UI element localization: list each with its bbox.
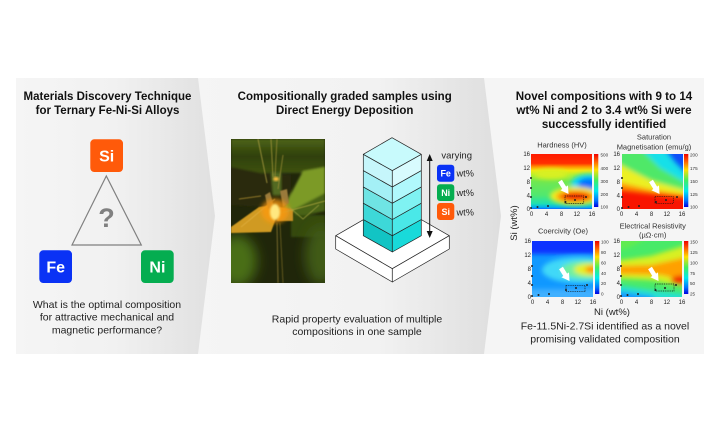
heading: compositionally graded samples: Compositionally graded samples using [238,91,452,103]
text: validated composition: promising validated composition [530,334,680,346]
chart: saturation magnetisation: 12 [613,166,621,172]
chart: saturation magnetisation: 0 [617,207,621,213]
text: rapid property evaluation: compositions in one sample [292,326,422,338]
text: optimal composition question: magnetic performance? [52,324,162,336]
chart: electrical resistivity: 12 [613,253,621,259]
marker overlay [620,265,677,297]
legend: varying wt%: wt% [456,207,474,217]
chart: saturation magnetisation: Saturation [637,133,671,142]
diagram: graded sample block [336,138,449,282]
chart: hardness: Hardness (HV) [537,141,587,150]
legend: varying wt% [437,150,474,220]
chart: coercivity: 16 [524,239,532,245]
heading: novel compositions: wt% Ni and 2 to 3.4 wt% Si were [515,104,692,117]
chart: saturation magnetisation: 125 [690,192,698,197]
arrow: vertical gradient direction [427,154,433,238]
tower layers [363,138,421,252]
legend: varying wt%: wt% [456,188,474,198]
chart: electrical resistivity: 75 [690,271,696,276]
chart: electrical resistivity: 0 [617,295,621,301]
chart: electrical resistivity: 100 [690,260,698,266]
panel: discovery technique [16,78,215,354]
chart: coercivity: 12 [574,300,582,306]
icon: Fe badge [39,250,72,283]
chart: coercivity: 80 [601,250,607,255]
chart: hardness: 0 [527,207,531,213]
axis label: Ni: Ni (wt%) [594,307,630,318]
text: optimal composition question: for attractive mechanical and [40,312,174,324]
icon: ternary triangle: ? [98,203,115,233]
text: rapid property evaluation: Rapid property evaluation of multiple [272,314,442,326]
panel: results [480,78,704,354]
chart: hardness: 0 [530,212,534,218]
chart: hardness: 8 [527,180,531,186]
chart: saturation magnetisation: 100 [690,204,698,210]
icon: Si badge: Si [99,148,114,166]
chart: saturation magnetisation: 16 [679,212,686,218]
icon: Ni badge: Ni [149,260,165,276]
chart: coercivity: 60 [601,260,607,266]
chart: saturation magnetisation: 150 [690,179,698,184]
chart: hardness: 12 [573,212,581,218]
chart: hardness: 4 [527,194,531,200]
chart: saturation magnetisation [613,133,698,218]
chart: saturation magnetisation: 16 [613,152,621,158]
legend: varying wt%: wt% [456,168,474,178]
icon: Si badge [90,139,123,172]
chart: coercivity: Coercivity (Oe) [538,227,589,236]
chart: coercivity: 0 [531,300,535,306]
chart: coercivity: 12 [524,253,532,259]
chart: hardness: 100 [600,204,609,210]
chart: hardness [523,141,609,218]
heading: discovery technique: for Ternary Fe-Ni-Si Alloys [36,105,179,117]
chart: hardness: 400 [600,166,609,171]
heading: compositionally graded samples: Direct Energy Deposition [276,105,413,117]
chart: hardness: 8 [560,212,564,218]
marker overlay [621,177,678,209]
chart: electrical resistivity: 50 [690,281,696,286]
heading: discovery technique: Materials Discovery Technique [24,91,191,103]
chart: saturation magnetisation: Magnetisation (emu/g) [617,143,692,152]
chart: hardness: 16 [523,152,531,158]
chart: electrical resistivity: 16 [613,239,621,245]
chart: saturation magnetisation: 200 [690,152,698,158]
chart: coercivity: 100 [601,240,609,244]
chart: electrical resistivity: 4 [617,281,621,287]
axis label: Si: Si (wt%) [509,205,520,241]
chart: electrical resistivity: Electrical Resistivity [620,221,686,230]
icon: ternary triangle [72,176,141,245]
chart: saturation magnetisation: 8 [650,212,654,218]
chart: hardness: 500 [600,152,609,158]
chart: hardness: 16 [589,212,596,218]
chart: hardness: 200 [600,192,609,197]
chart: electrical resistivity: 16 [679,300,686,306]
legend: varying wt%: varying [441,150,472,162]
base plate [336,203,449,282]
chart: coercivity: 4 [546,300,550,306]
heading: novel compositions: successfully identified [542,118,666,131]
marker overlay [530,177,587,209]
chart: electrical resistivity: (µΩ·cm) [639,231,667,240]
chart: coercivity [524,228,608,304]
chart: coercivity: 20 [601,281,607,286]
chart: electrical resistivity: 4 [635,300,639,306]
heading: novel compositions: Novel compositions with 9 to 14 [516,90,693,103]
chart: coercivity: 0 [601,292,604,296]
chart: saturation magnetisation: 4 [617,194,621,200]
icon: Ni badge [141,250,174,283]
legend: varying wt%: Si [441,207,450,217]
chart: electrical resistivity: 150 [690,240,698,244]
chart: saturation magnetisation: 8 [617,180,621,186]
chart: electrical resistivity: 125 [690,250,698,255]
chart: electrical resistivity [613,221,698,306]
legend: varying wt%: Fe [440,168,451,178]
chart: coercivity: 16 [590,300,597,306]
chart: coercivity: 40 [601,271,607,276]
text: optimal composition question: What is the optimal composition [33,299,181,311]
chart: electrical resistivity: 8 [617,267,621,273]
chart: hardness: 300 [600,179,609,184]
chart: coercivity: 8 [561,300,565,306]
chart: electrical resistivity: 12 [663,300,671,306]
legend: varying wt%: Ni [441,188,450,198]
chart: coercivity: 0 [528,295,532,301]
chart: saturation magnetisation: 175 [690,166,698,171]
chart: electrical resistivity: 8 [650,300,654,306]
panel: deposition [190,78,501,354]
chart: hardness: 12 [523,166,531,172]
chart: saturation magnetisation: 12 [663,212,671,218]
chart: coercivity: 8 [528,267,532,273]
chart: electrical resistivity: 0 [620,300,624,306]
chart: saturation magnetisation: 0 [620,212,624,218]
chart: coercivity: 4 [528,281,532,287]
photo: deposition process [231,139,325,283]
marker overlay [531,265,588,297]
text: validated composition: Fe-11.5Ni-2.7Si identified as a novel [521,321,689,333]
chart: electrical resistivity: 25 [690,292,696,296]
icon: Fe badge: Fe [46,260,65,276]
chart: hardness: 4 [545,212,549,218]
chart: saturation magnetisation: 4 [635,212,639,218]
